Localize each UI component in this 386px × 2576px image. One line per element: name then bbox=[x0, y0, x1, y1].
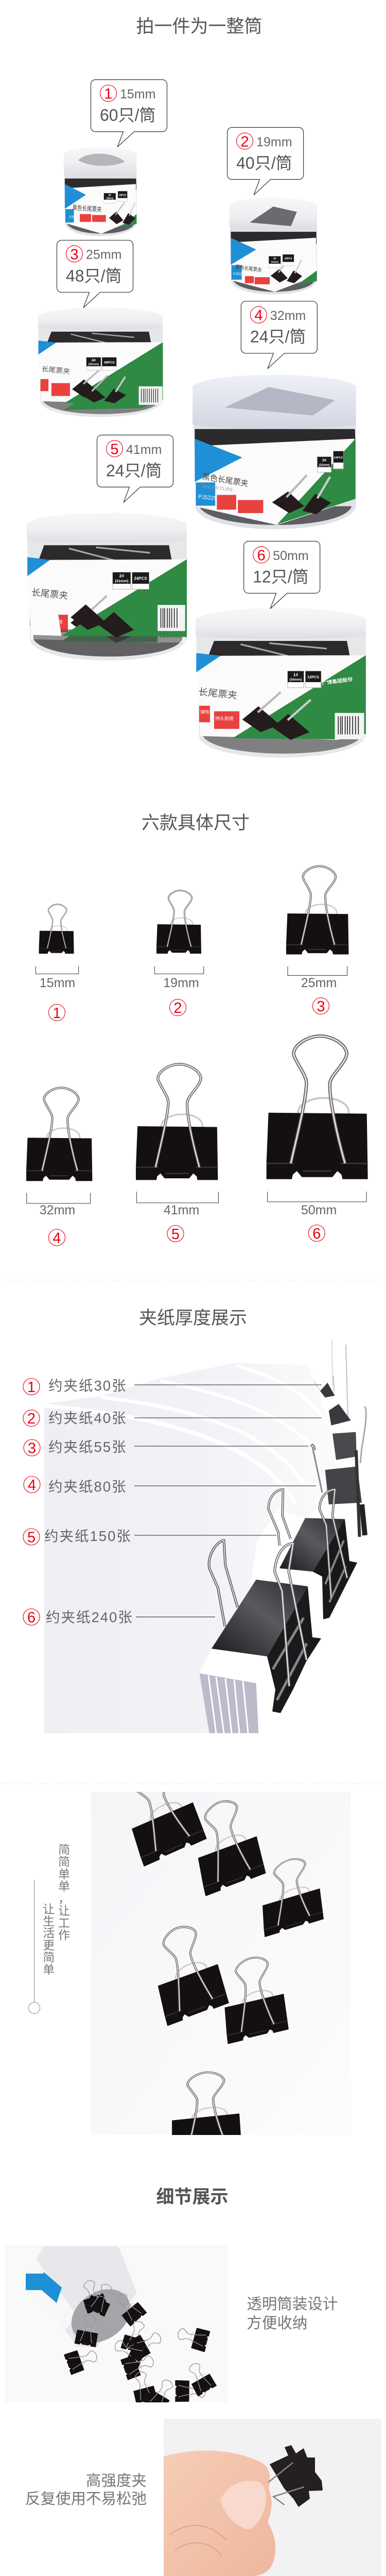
clip 15mm bbox=[36, 904, 79, 1022]
text block: vertical slogan: 工 bbox=[58, 1916, 70, 1929]
panel: jar 6 50mm: 弹性好 bbox=[200, 709, 214, 715]
text block: vertical slogan: 更 bbox=[43, 1939, 55, 1952]
clip 41mm: 5 bbox=[171, 1226, 180, 1243]
panel: jar 6 50mm: 持久耐用 bbox=[215, 716, 234, 721]
title: 六款具体尺寸: 六款具体尺寸 bbox=[142, 813, 250, 833]
panel: jar 5 41mm: 长尾票夹 bbox=[31, 587, 68, 601]
text block: vertical slogan bbox=[29, 1843, 70, 2013]
panel: jar 4 32mm: 3# bbox=[322, 458, 327, 463]
panel: jar 4 32mm: PJ5229 bbox=[198, 494, 217, 502]
panel: jar 4 32mm: (32mm) bbox=[319, 464, 330, 467]
panel: jar 3 25mm bbox=[38, 308, 163, 417]
label row 2: 约夹纸40张 bbox=[23, 1410, 322, 1427]
clip: smallest 1 bbox=[314, 1340, 348, 1417]
panel: jar 4 32mm: 黑色长尾票夹 bbox=[202, 472, 249, 488]
panel: paper thickness photo bbox=[44, 1340, 366, 1733]
callout: 50mm 12只/筒: 12只/筒 bbox=[253, 568, 309, 586]
panel: jar 6 50mm: (50mm) bbox=[290, 678, 302, 682]
panel: jar 3 25mm: 4# bbox=[92, 358, 96, 362]
panel: jar 1 15mm: PJ5226 bbox=[69, 215, 79, 219]
clip 19mm: 2 bbox=[173, 1000, 182, 1016]
text block: vertical slogan: 单 bbox=[58, 1867, 70, 1880]
panel: jar 6 50mm: 广博集团股份 bbox=[322, 676, 353, 686]
text block: vertical slogan: 让 bbox=[58, 1904, 70, 1918]
clip 32mm bbox=[26, 1088, 92, 1247]
panel: jar 5 41mm: (41mm) bbox=[115, 579, 129, 583]
callout: 15mm 60只/筒: 60只/筒 bbox=[100, 106, 155, 125]
clip: 2 bbox=[329, 1404, 351, 1426]
text block: vertical slogan: 简 bbox=[43, 1951, 55, 1964]
panel: jar 5 41mm: 持久耐用 bbox=[45, 619, 62, 624]
panel: jar 2 19mm bbox=[230, 198, 317, 294]
label row 6: 约夹纸240张: 6 bbox=[27, 1609, 36, 1626]
clip 50mm: 6 bbox=[312, 1226, 321, 1242]
panel: jar 2 19mm: PJ5227 bbox=[233, 272, 243, 276]
clip: 4 bbox=[311, 1445, 365, 1537]
panel: six clip sizes bbox=[26, 866, 368, 1247]
label row 3: 约夹纸55张: 约夹纸55张 bbox=[48, 1439, 127, 1455]
text block: vertical slogan: 单 bbox=[43, 1962, 55, 1976]
text block: 高强度夹: 高强度夹 bbox=[86, 2472, 147, 2489]
panel: jar 1 15mm: 黑色长尾票夹 bbox=[72, 204, 102, 214]
panel: jar 5 41mm: 2# bbox=[119, 573, 124, 578]
callout: 25mm 48只/筒 bbox=[57, 240, 133, 308]
callout: 50mm 12只/筒: 50mm bbox=[273, 549, 309, 563]
text block: vertical slogan: 单 bbox=[58, 1879, 70, 1893]
label row 6: 约夹纸240张 bbox=[23, 1608, 215, 1626]
text block: vertical slogan: 作 bbox=[58, 1928, 70, 1942]
text block: 高强度夹 bbox=[25, 2472, 147, 2507]
callout: 41mm 24只/筒: 5 bbox=[110, 441, 119, 457]
panel: jar 6 50mm: 1# bbox=[293, 672, 299, 677]
callout: 19mm 40只/筒 bbox=[227, 127, 304, 195]
panel: jar 2 19mm: (19mm) bbox=[271, 260, 278, 263]
label row 4: 约夹纸80张: 4 bbox=[28, 1477, 36, 1494]
clip 41mm: 41mm bbox=[164, 1203, 199, 1217]
callout: 41mm 24只/筒: 24只/筒 bbox=[106, 461, 162, 480]
label row 1: 约夹纸30张: 1 bbox=[27, 1379, 36, 1396]
callout: 41mm 24只/筒 bbox=[97, 435, 173, 502]
clip 41mm bbox=[136, 1064, 218, 1243]
clip 25mm: 25mm bbox=[301, 976, 337, 990]
callout: 25mm 48只/筒: 48只/筒 bbox=[66, 266, 121, 285]
panel: jar 5 41mm: 弹性好 bbox=[32, 613, 45, 618]
panel: jar 5 41mm bbox=[27, 513, 187, 660]
label row 1: 约夹纸30张 bbox=[23, 1378, 322, 1396]
callout: 15mm 60只/筒: 1 bbox=[104, 86, 113, 103]
callout: 19mm 40只/筒: 19mm bbox=[256, 135, 292, 149]
label row 3: 约夹纸55张 bbox=[24, 1439, 308, 1457]
callout: 50mm 12只/筒: 6 bbox=[257, 547, 266, 564]
callout: 15mm 60只/筒 bbox=[91, 80, 167, 147]
label row 4: 约夹纸80张: 约夹纸80张 bbox=[48, 1479, 127, 1495]
callout: 15mm 60只/筒: 15mm bbox=[120, 87, 155, 101]
text block: vertical slogan: ， bbox=[58, 1892, 70, 1905]
clip 19mm bbox=[154, 890, 204, 1016]
callout: 25mm 48只/筒: 25mm bbox=[86, 248, 121, 262]
panel: jar 4 32mm: BINDER CLIPS bbox=[202, 483, 233, 493]
panel: detail photo clips bbox=[7, 2561, 243, 2576]
clip 25mm bbox=[286, 866, 349, 1015]
label row 1: 约夹纸30张: 约夹纸30张 bbox=[48, 1378, 127, 1394]
panel: jar 4 32mm: 24PCS bbox=[334, 456, 343, 460]
panel: jar 6 50mm bbox=[196, 608, 366, 758]
panel: detail photo tube bbox=[26, 2246, 217, 2402]
title: 拍一件为一整筒: 拍一件为一整筒 bbox=[136, 16, 262, 37]
clip 15mm: 1 bbox=[52, 1005, 61, 1022]
panel: jar 6 50mm: 12PCS bbox=[307, 675, 319, 680]
text block: vertical slogan: 简 bbox=[58, 1855, 70, 1868]
clip held in fingers bbox=[270, 2445, 323, 2507]
callout: 32mm 24只/筒 bbox=[241, 301, 317, 369]
clip 50mm: 50mm bbox=[301, 1203, 337, 1217]
panel: clips on white photo bbox=[91, 1792, 324, 2135]
label row 5: 约夹纸150张: 约夹纸150张 bbox=[44, 1528, 132, 1544]
panel: jar 3 25mm: 长尾票夹 bbox=[41, 365, 71, 376]
clip: 5 bbox=[269, 1489, 357, 1619]
panel: jar 1 15mm: (15mm) bbox=[107, 197, 114, 199]
callout: 19mm 40只/筒: 40只/筒 bbox=[236, 154, 292, 172]
label row 3: 约夹纸55张: 3 bbox=[28, 1440, 36, 1457]
text block: 透明筒装设计: 透明筒装设计 bbox=[247, 2296, 338, 2313]
callout: 32mm 24只/筒: 4 bbox=[254, 308, 262, 324]
clip 15mm: 15mm bbox=[40, 976, 75, 990]
panel: detail photo hand bbox=[164, 2419, 381, 2576]
label row 5: 约夹纸150张: 5 bbox=[27, 1529, 36, 1546]
callout: 32mm 24只/筒: 32mm bbox=[270, 309, 306, 323]
clip 32mm: 32mm bbox=[40, 1203, 75, 1217]
label row 6: 约夹纸240张: 约夹纸240张 bbox=[46, 1609, 133, 1625]
panel: jar 2 19mm: 5# bbox=[273, 257, 276, 261]
label row 4: 约夹纸80张 bbox=[24, 1477, 316, 1495]
callout: 41mm 24只/筒: 41mm bbox=[126, 443, 162, 457]
title: 夹纸厚度展示: 夹纸厚度展示 bbox=[139, 1308, 247, 1328]
label row 2: 约夹纸40张: 2 bbox=[27, 1411, 36, 1427]
panel: jar 2 19mm: 黑色长尾票夹 bbox=[235, 264, 262, 274]
label row 5: 约夹纸150张 bbox=[23, 1528, 276, 1546]
hand bbox=[164, 2450, 275, 2576]
callout: 50mm 12只/筒 bbox=[244, 541, 320, 609]
label row 2: 约夹纸40张: 约夹纸40张 bbox=[48, 1410, 127, 1426]
text block: 高强度夹: 反复使用不易松弛 bbox=[25, 2490, 147, 2507]
callout: 25mm 48只/筒: 3 bbox=[70, 246, 79, 263]
panel: jar 2 19mm: 40PCS bbox=[285, 257, 292, 261]
paper stack bbox=[200, 1649, 267, 1733]
text block: vertical slogan: 生 bbox=[43, 1914, 55, 1928]
callout: 19mm 40只/筒: 2 bbox=[241, 133, 249, 150]
text block: 透明筒装设计: 方便收纳 bbox=[247, 2315, 307, 2332]
panel: jar 5 41mm: 24PCS bbox=[134, 577, 147, 581]
clip 32mm: 4 bbox=[52, 1230, 61, 1247]
title: 细节展示: 细节展示 bbox=[156, 2187, 229, 2207]
text block: vertical slogan: 活 bbox=[43, 1926, 55, 1940]
clip 50mm bbox=[267, 1036, 368, 1242]
text block: vertical slogan: 简 bbox=[58, 1843, 70, 1856]
panel: jar 3 25mm: 48PCS bbox=[104, 361, 115, 364]
panel: jar 1 15mm: 60PCS bbox=[119, 194, 127, 197]
clip 19mm: 19mm bbox=[163, 976, 199, 990]
text block: 透明筒装设计 bbox=[247, 2296, 338, 2332]
panel: jar 1 15mm bbox=[64, 147, 136, 236]
clip: 3 bbox=[332, 1406, 366, 1463]
clip 25mm: 3 bbox=[317, 998, 325, 1015]
clip: 6 bbox=[209, 1540, 321, 1713]
panel: jar 6 50mm: 长尾票夹 bbox=[198, 686, 238, 701]
callout: 32mm 24只/筒: 24只/筒 bbox=[250, 328, 306, 346]
panel: jar 3 25mm: (25mm) bbox=[89, 363, 99, 366]
panel: jar 1 15mm: 6# bbox=[109, 194, 111, 197]
panel: jar 4 32mm bbox=[192, 375, 356, 529]
text block: vertical slogan: 让 bbox=[43, 1902, 55, 1916]
